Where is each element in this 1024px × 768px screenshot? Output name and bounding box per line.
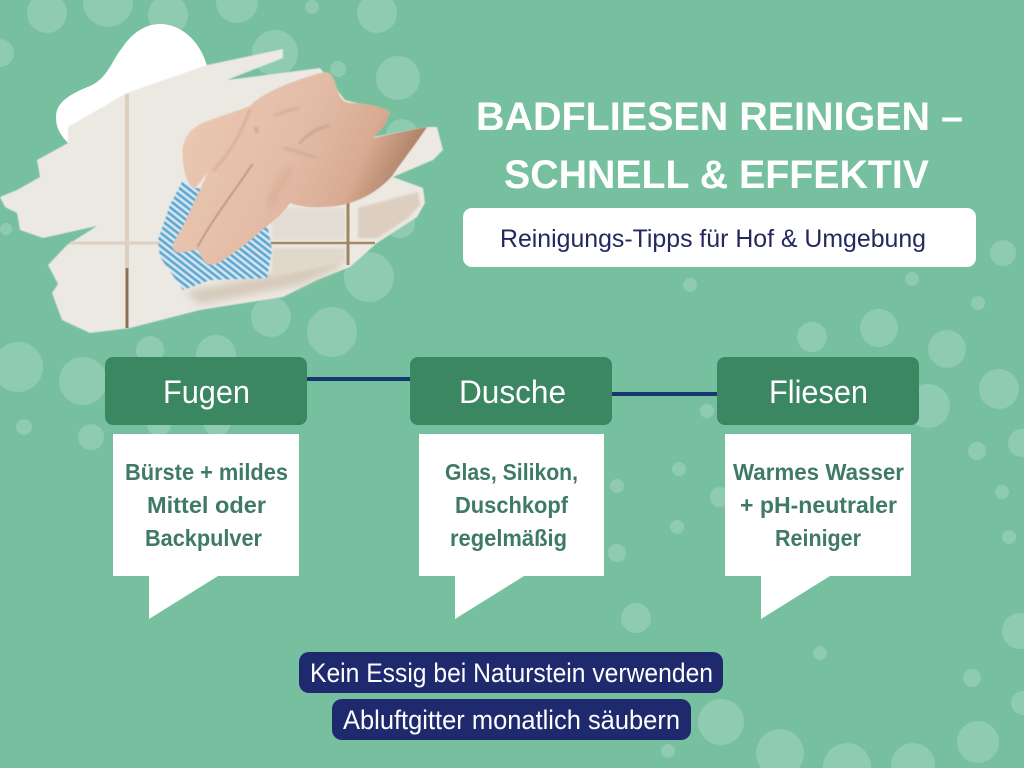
note: Essig warning [299,652,723,693]
note: Abluftgitter [332,699,691,740]
panel: Fliesen [717,357,919,619]
note: Essig warning: Kein Essig bei Naturstein verwenden [310,658,713,688]
photo: hand cleaning tiles with cloth [0,24,443,333]
callout: Dusche tips [419,434,604,619]
connector: Dusche to Fliesen [612,392,717,396]
callout: Dusche tips: regelmäßig [450,525,567,551]
callout: Fugen tips: Bürste + mildes [125,459,288,485]
tile grout lines [70,94,375,328]
callout: Fugen tips [113,434,299,619]
panel: Fugen [105,357,307,619]
hand [173,72,427,265]
title [476,95,963,197]
heading: Dusche: Dusche [459,374,566,410]
callout: Dusche tips: Glas, Silikon, [445,459,578,485]
callout: Dusche tips: Duschkopf [455,492,568,518]
note: Abluftgitter: Abluftgitter monatlich säubern [343,705,680,735]
subtitle box [463,208,976,267]
panel: Dusche [410,357,612,619]
callout: Fliesen tips: + pH-neutraler [740,492,897,518]
white brush blob [56,24,207,145]
tile dirt shading [185,258,345,304]
title: BADFLIESEN REINIGEN – [476,95,963,139]
blue striped cloth [158,157,272,290]
subtitle box: Reinigungs-Tipps für Hof & Umgebung [500,225,926,253]
heading: Dusche [410,357,612,425]
heading: Fugen: Fugen [163,374,250,410]
tile brush stroke [0,49,443,333]
callout: Fugen tips: Backpulver [145,525,262,551]
connector: Fugen to Dusche [307,377,410,381]
callout: Fliesen tips [725,434,911,619]
hand creases and veins [198,108,328,246]
heading: Fliesen [717,357,919,425]
heading: Fugen [105,357,307,425]
title: SCHNELL & EFFEKTIV [504,153,929,197]
callout: Fliesen tips: Reiniger [775,525,861,551]
callout: Fliesen tips: Warmes Wasser [733,459,904,485]
heading: Fliesen: Fliesen [769,374,868,410]
callout: Fugen tips: Mittel oder [147,492,266,518]
